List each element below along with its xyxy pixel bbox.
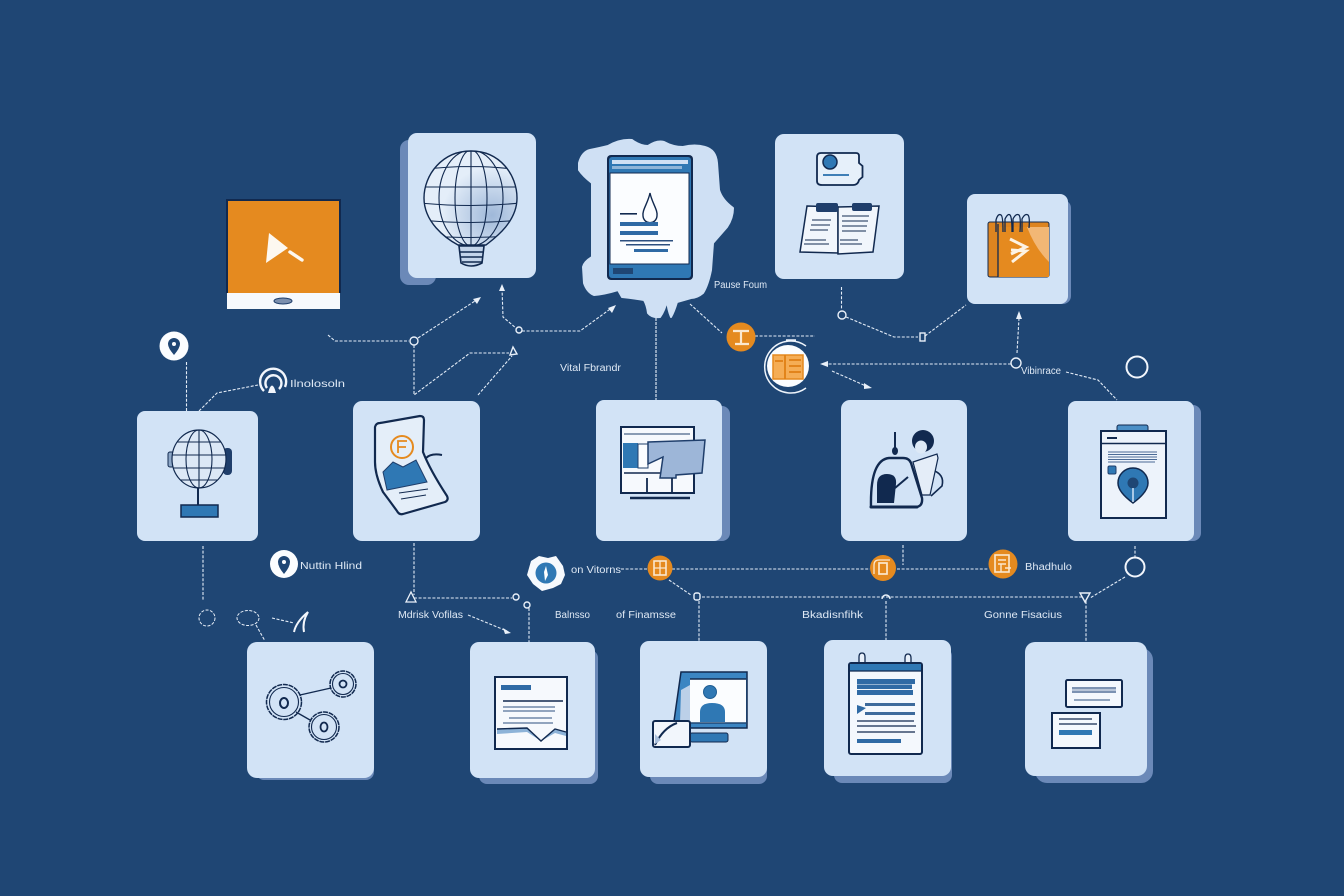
node: orange connector top [726,322,756,352]
card: message cards [1025,642,1153,783]
label: vitorns: on Vitorns [571,565,621,576]
node: orange document connector 1 [648,556,672,580]
node: gear compass [527,556,565,591]
card: connected nodes [247,642,374,780]
icon: play cursor [266,233,302,263]
icon: user monitor [653,672,747,747]
card: spiral note [824,640,952,783]
label: media: Mdrisk Vofilas [398,610,463,621]
node: orange document connector 3 [988,550,1018,578]
icon: camera badge [817,153,862,185]
icon: note document [849,653,922,754]
card: tablet blob [579,140,733,317]
icon: node graph [266,671,356,742]
card: phone with chart [353,401,480,541]
connectors: left network [186,362,294,641]
icon: monitor windows [621,427,705,498]
node: location pin top left [160,332,188,360]
icon: clipboard [1101,425,1166,518]
icon: orange notebook [988,214,1049,277]
icon: balloon [420,150,520,266]
card: report with trend line [470,642,598,784]
card: orange folder [967,194,1071,304]
label: pause: Pause Foum [714,280,767,291]
icon: people [871,430,943,507]
label: volume: Vibinrace [1021,366,1061,377]
icon: open notebook [800,203,879,254]
node: cloud cluster [199,610,308,632]
icon: curved phone [375,416,448,514]
label: resources: Gonne Fisacius [984,610,1062,621]
card: desktop monitor [596,400,730,541]
label: vital: Vital Fbrandr [560,363,622,374]
label: signal: Ilnolosoln [290,379,345,390]
node: signal icon [260,369,286,393]
icon: chat panels [1052,680,1122,748]
icon: globe [168,430,232,517]
card: person with speaker [841,400,967,541]
label: finance: of Finamsse [616,610,676,621]
connectors: upper network [328,284,1117,400]
card: monitor with user [640,641,767,784]
card: orange video player [226,199,341,309]
node: orange book badge [765,340,809,393]
label: distribute: Bhadhulo [1025,562,1072,573]
node: location pin middle left [270,550,298,578]
icon: tablet [607,155,693,280]
node: orange document connector 2 [870,555,896,581]
label: market: Nuttin Hlind [300,561,362,572]
icon: report [495,677,567,749]
card: globe on stand [137,411,258,541]
network diagram [137,133,1201,784]
card: clipboard with pin [1068,401,1201,541]
node: open circle lower right [1126,558,1144,576]
card: hot air balloon globe [400,133,536,285]
node: open circle top right [1126,356,1148,378]
label: bookmark: Bkadisnfihk [802,610,864,621]
card: document with camera [775,134,904,279]
connectors: lower network [406,543,1135,642]
label: balance: Balnsso [555,610,590,621]
